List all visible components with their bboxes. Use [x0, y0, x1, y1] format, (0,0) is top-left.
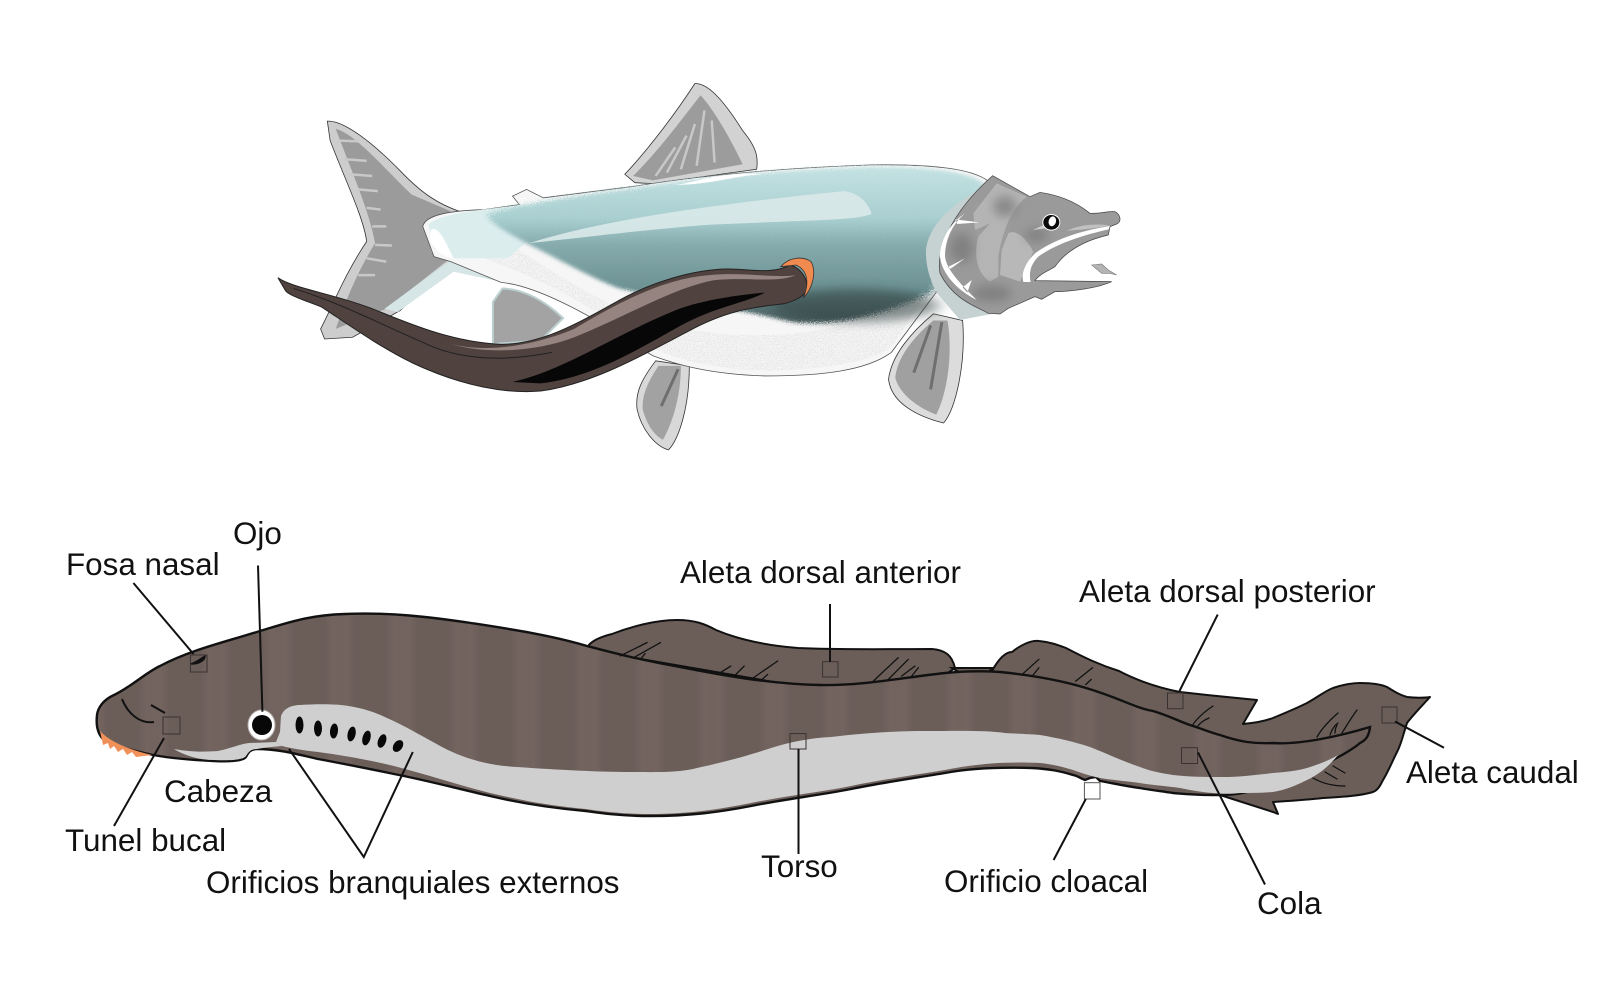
flank highlight	[529, 191, 872, 243]
pelvic fin	[637, 361, 689, 450]
pectoral fin	[889, 314, 963, 423]
nostril	[191, 656, 205, 664]
label: Ojo: Ojo	[233, 516, 282, 551]
orange sucker disc	[781, 258, 814, 298]
belly speckle	[484, 228, 925, 371]
fish body	[423, 165, 992, 376]
caudal fin	[321, 121, 501, 339]
gill edge band	[926, 182, 992, 320]
light cheek patches	[973, 183, 1027, 282]
anal fin	[493, 289, 563, 344]
fin rays	[620, 643, 1357, 786]
eye	[248, 710, 275, 740]
label: Fosa nasal	[66, 547, 220, 654]
external gill openings	[296, 716, 405, 754]
parasitic lamprey	[278, 258, 814, 392]
label: Torso: Torso	[761, 849, 838, 884]
dorsal fin bridge	[952, 668, 992, 677]
label: Fosa nasal: Fosa nasal	[66, 547, 220, 582]
label: Torso	[761, 749, 838, 884]
head speckle	[975, 197, 1027, 280]
reference squares	[163, 655, 1397, 799]
label: Tunel bucal	[65, 738, 226, 858]
jaw light strip	[174, 742, 282, 760]
label: Orificios branquiales externos: Orificios branquiales externos	[206, 865, 620, 900]
orange mouth fringe	[100, 731, 152, 757]
head base	[939, 176, 1120, 314]
anterior dorsal fin	[587, 620, 955, 690]
label: Ojo	[233, 516, 282, 712]
label: Orificio cloacal	[944, 799, 1148, 899]
lamprey diagram	[97, 614, 1430, 816]
rear fins silhouette	[992, 641, 1430, 814]
label: Aleta dorsal posterior	[1079, 574, 1376, 691]
label: Orificio cloacal: Orificio cloacal	[944, 864, 1148, 899]
head lines	[122, 699, 165, 722]
fish head	[926, 176, 1120, 320]
host fish illustration	[278, 84, 1120, 450]
snout highlight	[1067, 224, 1109, 231]
tooth fragment	[1092, 264, 1117, 275]
lamprey body	[97, 614, 1370, 816]
teal tail wash	[428, 205, 537, 258]
mottled shading	[950, 197, 1048, 302]
label: Cola: Cola	[1257, 886, 1322, 921]
fish eye	[1033, 214, 1060, 231]
label: Orificios branquiales externos	[206, 749, 620, 900]
label: Cola	[1198, 752, 1322, 921]
label: Aleta caudal: Aleta caudal	[1406, 755, 1579, 790]
white highlights	[430, 174, 762, 258]
light belly band	[276, 704, 1338, 814]
gill lines	[940, 213, 979, 300]
label: Aleta dorsal anterior: Aleta dorsal anterior	[680, 555, 961, 590]
upper lip strip	[1023, 226, 1110, 282]
label: Aleta caudal	[1395, 722, 1579, 790]
label: Cabeza: Cabeza	[164, 774, 273, 809]
label: Tunel bucal: Tunel bucal	[65, 823, 226, 858]
dark flank shading	[771, 289, 939, 322]
teal back and flank	[487, 167, 987, 323]
label: Aleta dorsal posterior: Aleta dorsal posterior	[1079, 574, 1376, 609]
dorsal fin	[625, 84, 757, 184]
